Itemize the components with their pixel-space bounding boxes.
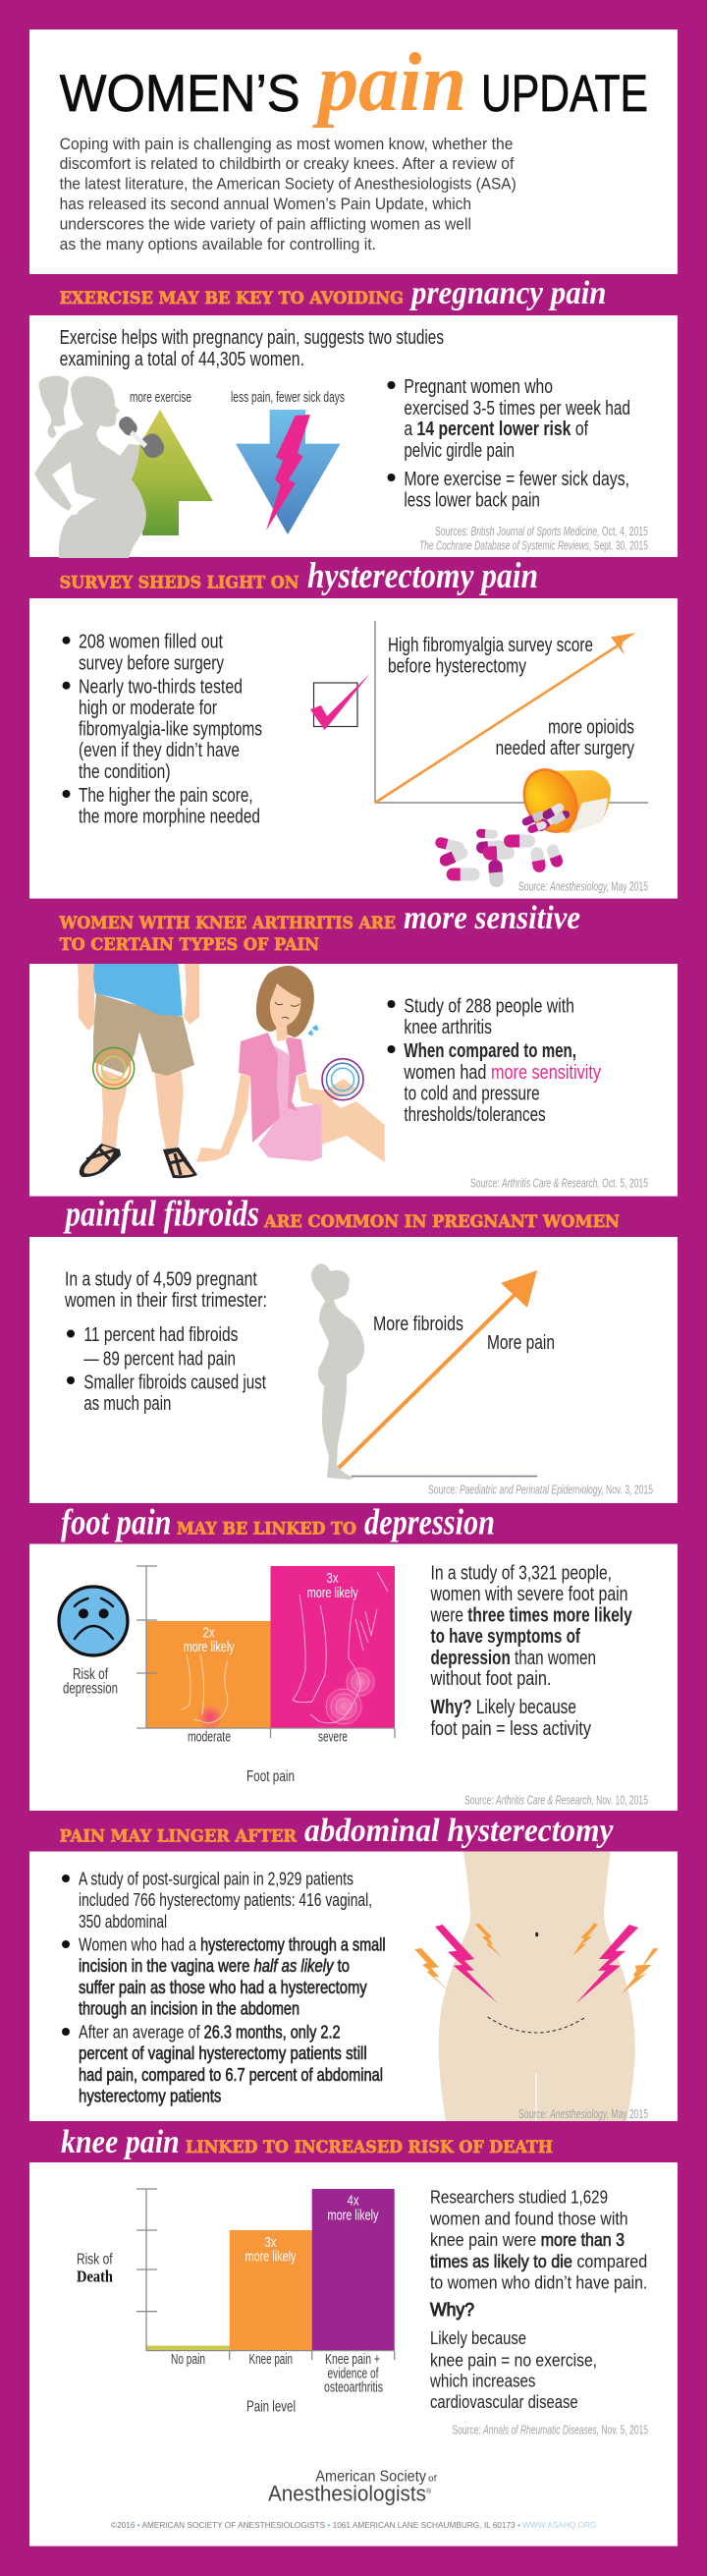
capsules bbox=[434, 802, 571, 888]
icon: pink lightning bolt bbox=[266, 415, 310, 531]
icon: green up arrow bbox=[107, 410, 213, 535]
logo: American Society of Anesthesiologists: of bbox=[428, 2474, 437, 2484]
bullet list: Women who had a hysterectomy through a small bbox=[79, 1934, 386, 1955]
bar chart: depression risk: more likely bbox=[307, 1585, 358, 1601]
bullet list: The higher the pain score, bbox=[79, 785, 253, 807]
intro text: the latest literature, the American Society of Anesthesiologists (ASA) bbox=[60, 175, 517, 193]
bullet list: When compared to men, bbox=[404, 1040, 576, 1062]
heading: hysterectomy pain: SURVEY SHEDS LIGHT ON bbox=[60, 574, 299, 591]
chart: fibroids vs pain arrow bbox=[339, 1270, 555, 1477]
bullet list: the condition) bbox=[79, 761, 171, 783]
bar chart: risk of death: evidence of bbox=[328, 2366, 379, 2381]
text block: without foot pain. bbox=[430, 1668, 552, 1690]
text block: In a study of 3,321 people, bbox=[430, 1562, 612, 1584]
axis label: Risk of bbox=[77, 2252, 113, 2268]
foot drawing: severe bbox=[293, 1572, 388, 1727]
chart: survey score vs opioids: more opioids bbox=[548, 717, 634, 739]
bullet list: Nearly two-thirds tested bbox=[79, 677, 243, 699]
bullet list: a 14 percent lower risk of bbox=[404, 419, 588, 440]
icon: spilled pill bottle bbox=[434, 760, 611, 888]
bullet list: Pregnant women who bbox=[404, 376, 553, 398]
text block: knee pain = no exercise, bbox=[430, 2349, 597, 2370]
bar chart: risk of death: more likely bbox=[328, 2207, 379, 2223]
bullet list: suffer pain as those who had a hysterectomy bbox=[79, 1977, 367, 1997]
source: Source: Arthritis Care & Research, Nov. 10, 2015 bbox=[464, 1793, 648, 1807]
footer address: ©2016 • AMERICAN SOCIETY OF ANESTHESIOLOGISTS • 1061 AMERICAN LANE SCHAUMBURG, IL 60173 • WWW.ASAHQ.ORG bbox=[111, 2520, 597, 2530]
bullet list: 208 women filled out bbox=[79, 632, 223, 653]
heading: painful fibroids: painful fibroids bbox=[63, 1195, 259, 1235]
bullet list: exercised 3-5 times per week had bbox=[404, 398, 630, 420]
bar chart: depression risk: 2x bbox=[202, 1624, 215, 1641]
heading: foot pain: depression bbox=[364, 1503, 495, 1542]
panel: title and introduction bbox=[29, 29, 678, 274]
intro text: underscores the wide variety of pain afflicting women as well bbox=[60, 216, 471, 234]
bullet list bbox=[62, 1868, 386, 2106]
text block: In a study of 4,509 pregnant bbox=[65, 1269, 257, 1291]
bar chart: risk of death: 3x bbox=[265, 2234, 277, 2251]
chart: survey score vs opioids: before hysterectomy bbox=[388, 656, 526, 678]
bar chart: depression risk: more likely bbox=[184, 1639, 235, 1655]
bullet list: high or moderate for bbox=[79, 698, 217, 719]
heading: knee arthritis: more sensitive bbox=[404, 900, 580, 936]
lead text bbox=[60, 327, 444, 370]
icon: checkbox with check mark bbox=[310, 674, 369, 730]
bullet list: A study of post-surgical pain in 2,929 patients bbox=[79, 1868, 354, 1888]
bar chart: depression risk: Foot pain bbox=[246, 1768, 295, 1785]
intro text: discomfort is related to childbirth or creaky knees. After a review of bbox=[60, 155, 515, 173]
bullet list: less lower back pain bbox=[404, 489, 540, 511]
text block: Why? Likely because bbox=[430, 1697, 576, 1718]
text block: depression than women bbox=[430, 1648, 596, 1669]
chart: survey score vs opioids bbox=[375, 621, 648, 803]
bullet list: women had more sensitivity bbox=[404, 1062, 601, 1084]
text block: women with severe foot pain bbox=[430, 1584, 628, 1605]
source: Source: Anesthesiology, May 2015 bbox=[518, 2107, 648, 2121]
bullet list: knee arthritis bbox=[404, 1017, 492, 1038]
foot drawing: moderate bbox=[181, 1654, 228, 1730]
panel: exercise and pregnancy bbox=[29, 315, 678, 558]
text block: foot pain = less activity bbox=[430, 1718, 591, 1740]
text block: women in their first trimester: bbox=[64, 1290, 267, 1312]
lead text: examining a total of 44,305 women. bbox=[60, 349, 304, 370]
intro text: as the many options available for controlling it. bbox=[60, 236, 376, 253]
bullet list: percent of vaginal hysterectomy patients still bbox=[79, 2043, 367, 2063]
heading: knee pain: knee pain bbox=[61, 2124, 180, 2160]
hand pain rings bbox=[322, 1059, 363, 1100]
text block: times as likely to die compared bbox=[430, 2251, 647, 2271]
bar chart: risk of death: Knee pain + bbox=[325, 2352, 380, 2368]
intro text: Coping with pain is challenging as most women know, whether the bbox=[60, 136, 513, 153]
icon: pregnant woman silhouette bbox=[311, 1263, 364, 1480]
bar chart: risk of death bbox=[136, 2189, 395, 2416]
heading: abdominal hysterectomy: PAIN MAY LINGER AFTER bbox=[60, 1826, 297, 1845]
icon: sad face bbox=[59, 1587, 128, 1655]
bullet list bbox=[387, 376, 630, 511]
axis label bbox=[63, 1666, 118, 1698]
bar chart: risk of death: Knee pain bbox=[249, 2352, 293, 2368]
text block: Why? bbox=[430, 2299, 474, 2320]
heading: knee arthritis bbox=[59, 900, 580, 954]
intro text bbox=[60, 136, 517, 253]
bullet list: survey before surgery bbox=[79, 653, 224, 675]
heading: pregnancy pain bbox=[60, 275, 607, 311]
panel: fibroids bbox=[29, 1237, 678, 1503]
illustration: woman holding knee bbox=[196, 966, 385, 1162]
title bbox=[60, 36, 648, 129]
text block: to women who didn’t have pain. bbox=[430, 2271, 647, 2293]
bar chart: depression risk: moderate bbox=[188, 1729, 231, 1745]
text block: knee pain were more than 3 bbox=[430, 2229, 625, 2250]
axis label: depression bbox=[63, 1681, 118, 1698]
logo: American Society of Anesthesiologists bbox=[268, 2468, 437, 2506]
bullet list: fibromyalgia-like symptoms bbox=[79, 719, 262, 741]
heading: knee pain: LINKED TO INCREASED RISK OF DEATH bbox=[186, 2138, 553, 2156]
panel: knee pain and logo bbox=[29, 2162, 678, 2547]
source: Source: Arthritis Care & Research, Oct. 5, 2015 bbox=[470, 1177, 648, 1191]
bullet list: Study of 288 people with bbox=[404, 996, 574, 1018]
bullet list: included 766 hysterectomy patients: 416 vaginal, bbox=[79, 1889, 372, 1910]
source: Source: Paediatric and Perinatal Epidemiology, Nov. 3, 2015 bbox=[428, 1484, 653, 1497]
bullet list: More exercise = fewer sick days, bbox=[404, 469, 629, 490]
bar chart: risk of death: 4x bbox=[348, 2193, 359, 2210]
bullet list: hysterectomy patients bbox=[79, 2086, 221, 2106]
bullet list: the more morphine needed bbox=[79, 806, 260, 827]
text block: were three times more likely bbox=[430, 1605, 632, 1627]
bar chart: risk of death: Pain level bbox=[246, 2399, 296, 2416]
source: Source: Annals of Rheumatic Diseases, Nov. 5, 2015 bbox=[452, 2423, 648, 2436]
heading: abdominal hysterectomy bbox=[60, 1813, 614, 1849]
intro text: has released its second annual Women’s Pain Update, which bbox=[60, 196, 471, 213]
text block: — 89 percent had pain bbox=[83, 1348, 236, 1370]
axis label bbox=[77, 2252, 113, 2285]
bullet list: thresholds/tolerances bbox=[404, 1104, 546, 1126]
source: Source: Anesthesiology, May 2015 bbox=[518, 879, 648, 893]
bar chart: risk of death: osteoarthritis bbox=[324, 2380, 383, 2395]
label: more exercise: more exercise bbox=[130, 390, 191, 406]
heading: knee arthritis: TO CERTAIN TYPES OF PAIN bbox=[60, 935, 319, 954]
icon: blue down arrow bbox=[236, 410, 341, 534]
text block: Researchers studied 1,629 bbox=[430, 2187, 608, 2208]
heading: pregnancy pain: pregnancy pain bbox=[408, 275, 607, 311]
logo: American Society of Anesthesiologists: American Society bbox=[315, 2468, 426, 2486]
sources: The Cochrane Database of Systemic Reviews, Sept. 30, 2015 bbox=[419, 538, 648, 552]
bar chart: risk of death: more likely bbox=[245, 2249, 297, 2266]
label: less pain: less pain, fewer sick days bbox=[231, 390, 345, 406]
bar chart: depression risk: 3x bbox=[326, 1570, 339, 1587]
text block: 11 percent had fibroids bbox=[83, 1324, 238, 1346]
bullet list: had pain, compared to 6.7 percent of abdominal bbox=[79, 2064, 383, 2085]
bullet list bbox=[387, 996, 601, 1126]
text block bbox=[430, 1562, 632, 1740]
text block bbox=[429, 2187, 647, 2412]
heading: hysterectomy pain bbox=[60, 556, 538, 596]
chart: survey score vs opioids: needed after surgery bbox=[496, 738, 634, 759]
heading: knee arthritis: WOMEN WITH KNEE ARTHRITIS ARE bbox=[59, 914, 396, 932]
sandals bbox=[80, 1144, 197, 1178]
heading: foot pain: MAY BE LINKED TO bbox=[177, 1519, 356, 1539]
text block: cardiovascular disease bbox=[430, 2391, 578, 2412]
text block: which increases bbox=[429, 2370, 536, 2391]
heading: hysterectomy pain: hysterectomy pain bbox=[307, 556, 538, 596]
panel: knee arthritis bbox=[29, 964, 678, 1197]
panel: fibromyalgia survey bbox=[29, 598, 678, 899]
text block: to have symptoms of bbox=[430, 1626, 580, 1648]
icon: dumbbell bbox=[116, 414, 168, 461]
heading: knee pain bbox=[61, 2124, 553, 2160]
bar chart: depression risk: severe bbox=[318, 1729, 348, 1745]
text block: women and found those with bbox=[429, 2208, 628, 2228]
heading: foot pain: foot pain bbox=[61, 1503, 171, 1542]
bullet list: incision in the vagina were half as likely to bbox=[79, 1955, 350, 1976]
title: WOMEN’S bbox=[60, 65, 300, 123]
title: pain bbox=[311, 36, 466, 129]
chart: survey score vs opioids: High fibromyalgia survey score bbox=[388, 635, 593, 656]
bullet list: 350 abdominal bbox=[79, 1911, 167, 1932]
sources bbox=[419, 525, 648, 552]
text block: as much pain bbox=[83, 1393, 171, 1415]
chart: fibroids vs pain arrow: More pain bbox=[487, 1332, 555, 1354]
title: UPDATE bbox=[481, 65, 648, 123]
illustration: man with knee pain bbox=[78, 964, 199, 1178]
chart: fibroids vs pain arrow: More fibroids bbox=[373, 1314, 463, 1335]
bar chart: risk of death: No pain bbox=[171, 2352, 205, 2368]
heading: foot pain bbox=[61, 1503, 495, 1542]
logo: American Society of Anesthesiologists: ® bbox=[426, 2488, 432, 2495]
bullet list bbox=[63, 632, 262, 827]
bullet list: (even if they didn’t have bbox=[79, 740, 240, 761]
text block: Smaller fibroids caused just bbox=[83, 1372, 266, 1393]
text block bbox=[64, 1269, 267, 1415]
axis label: Death bbox=[77, 2267, 113, 2285]
bullet list: After an average of 26.3 months, only 2.2 bbox=[79, 2021, 341, 2042]
axis label: Risk of bbox=[73, 1666, 108, 1683]
logo: American Society of Anesthesiologists: Anesthesiologists bbox=[268, 2482, 426, 2506]
panel: abdominal hysterectomy bbox=[29, 1851, 678, 2121]
bullet list: to cold and pressure bbox=[404, 1083, 540, 1104]
text block: Likely because bbox=[430, 2327, 526, 2348]
heading: painful fibroids bbox=[63, 1195, 620, 1235]
icon: pregnant woman lifting dumbbell bbox=[34, 376, 146, 558]
bullet list: through an incision in the abdomen bbox=[79, 1998, 299, 2019]
sources: Sources: British Journal of Sports Medicine, Oct. 4, 2015 bbox=[435, 525, 648, 538]
bar chart: depression risk bbox=[136, 1566, 395, 1785]
heading: abdominal hysterectomy: abdominal hysterectomy bbox=[304, 1813, 614, 1849]
bullet list: pelvic girdle pain bbox=[404, 440, 515, 462]
heading: pregnancy pain: EXERCISE MAY BE KEY TO AVOIDING bbox=[60, 289, 404, 308]
illustration: torso with pain bolts bbox=[414, 1851, 659, 2121]
heading: painful fibroids: ARE COMMON IN PREGNANT WOMEN bbox=[263, 1212, 620, 1231]
panel: foot pain bbox=[29, 1544, 678, 1811]
knee pain rings bbox=[93, 1047, 135, 1089]
lead text: Exercise helps with pregnancy pain, suggests two studies bbox=[60, 327, 444, 349]
